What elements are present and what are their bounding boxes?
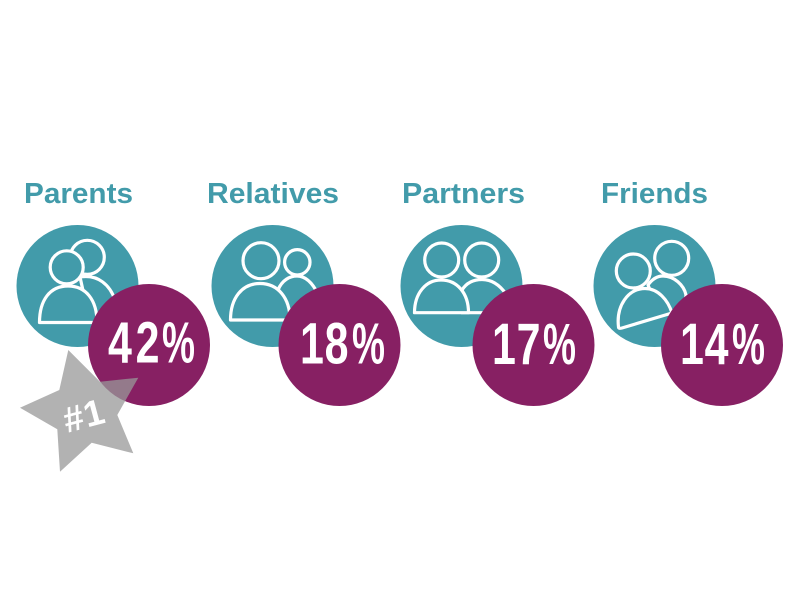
panel: partners	[400, 178, 594, 406]
icon: parents people	[40, 240, 115, 322]
icon: partners people	[414, 243, 506, 313]
teal circle: parents	[16, 225, 138, 347]
panel: friends	[594, 178, 783, 406]
purple circle: partners	[472, 284, 594, 406]
value: 14%	[680, 312, 765, 377]
rank text: #1	[58, 390, 110, 441]
value: 17%: %	[543, 313, 576, 377]
icon: star	[20, 350, 138, 472]
star badge: #1	[20, 350, 138, 472]
purple circle: parents	[88, 284, 210, 406]
value: 17%: 17	[492, 312, 541, 377]
heading: parents: Parents	[24, 178, 133, 210]
value: 17%	[492, 312, 576, 377]
value: 14%: %	[732, 313, 765, 377]
value: 14%: 14	[680, 312, 729, 377]
panel: parents	[16, 178, 210, 406]
heading: partners: Partners	[402, 178, 525, 210]
value: 18%: 18	[300, 311, 349, 376]
value: 42%: 42	[108, 310, 163, 375]
icon: relatives people	[230, 243, 318, 320]
value: 18%	[300, 311, 385, 377]
value: 42%	[108, 310, 195, 376]
teal circle: relatives	[212, 225, 334, 347]
teal circle: partners	[400, 225, 522, 347]
purple circle: friends	[661, 284, 783, 406]
value: 18%: %	[352, 312, 385, 377]
value: 42%: %	[162, 311, 195, 376]
teal circle: friends	[594, 225, 716, 347]
icon: friends people	[616, 241, 689, 328]
panel: relatives	[207, 178, 400, 406]
heading: friends: Friends	[601, 178, 708, 210]
heading: relatives: Relatives	[207, 178, 339, 210]
purple circle: relatives	[278, 284, 400, 406]
